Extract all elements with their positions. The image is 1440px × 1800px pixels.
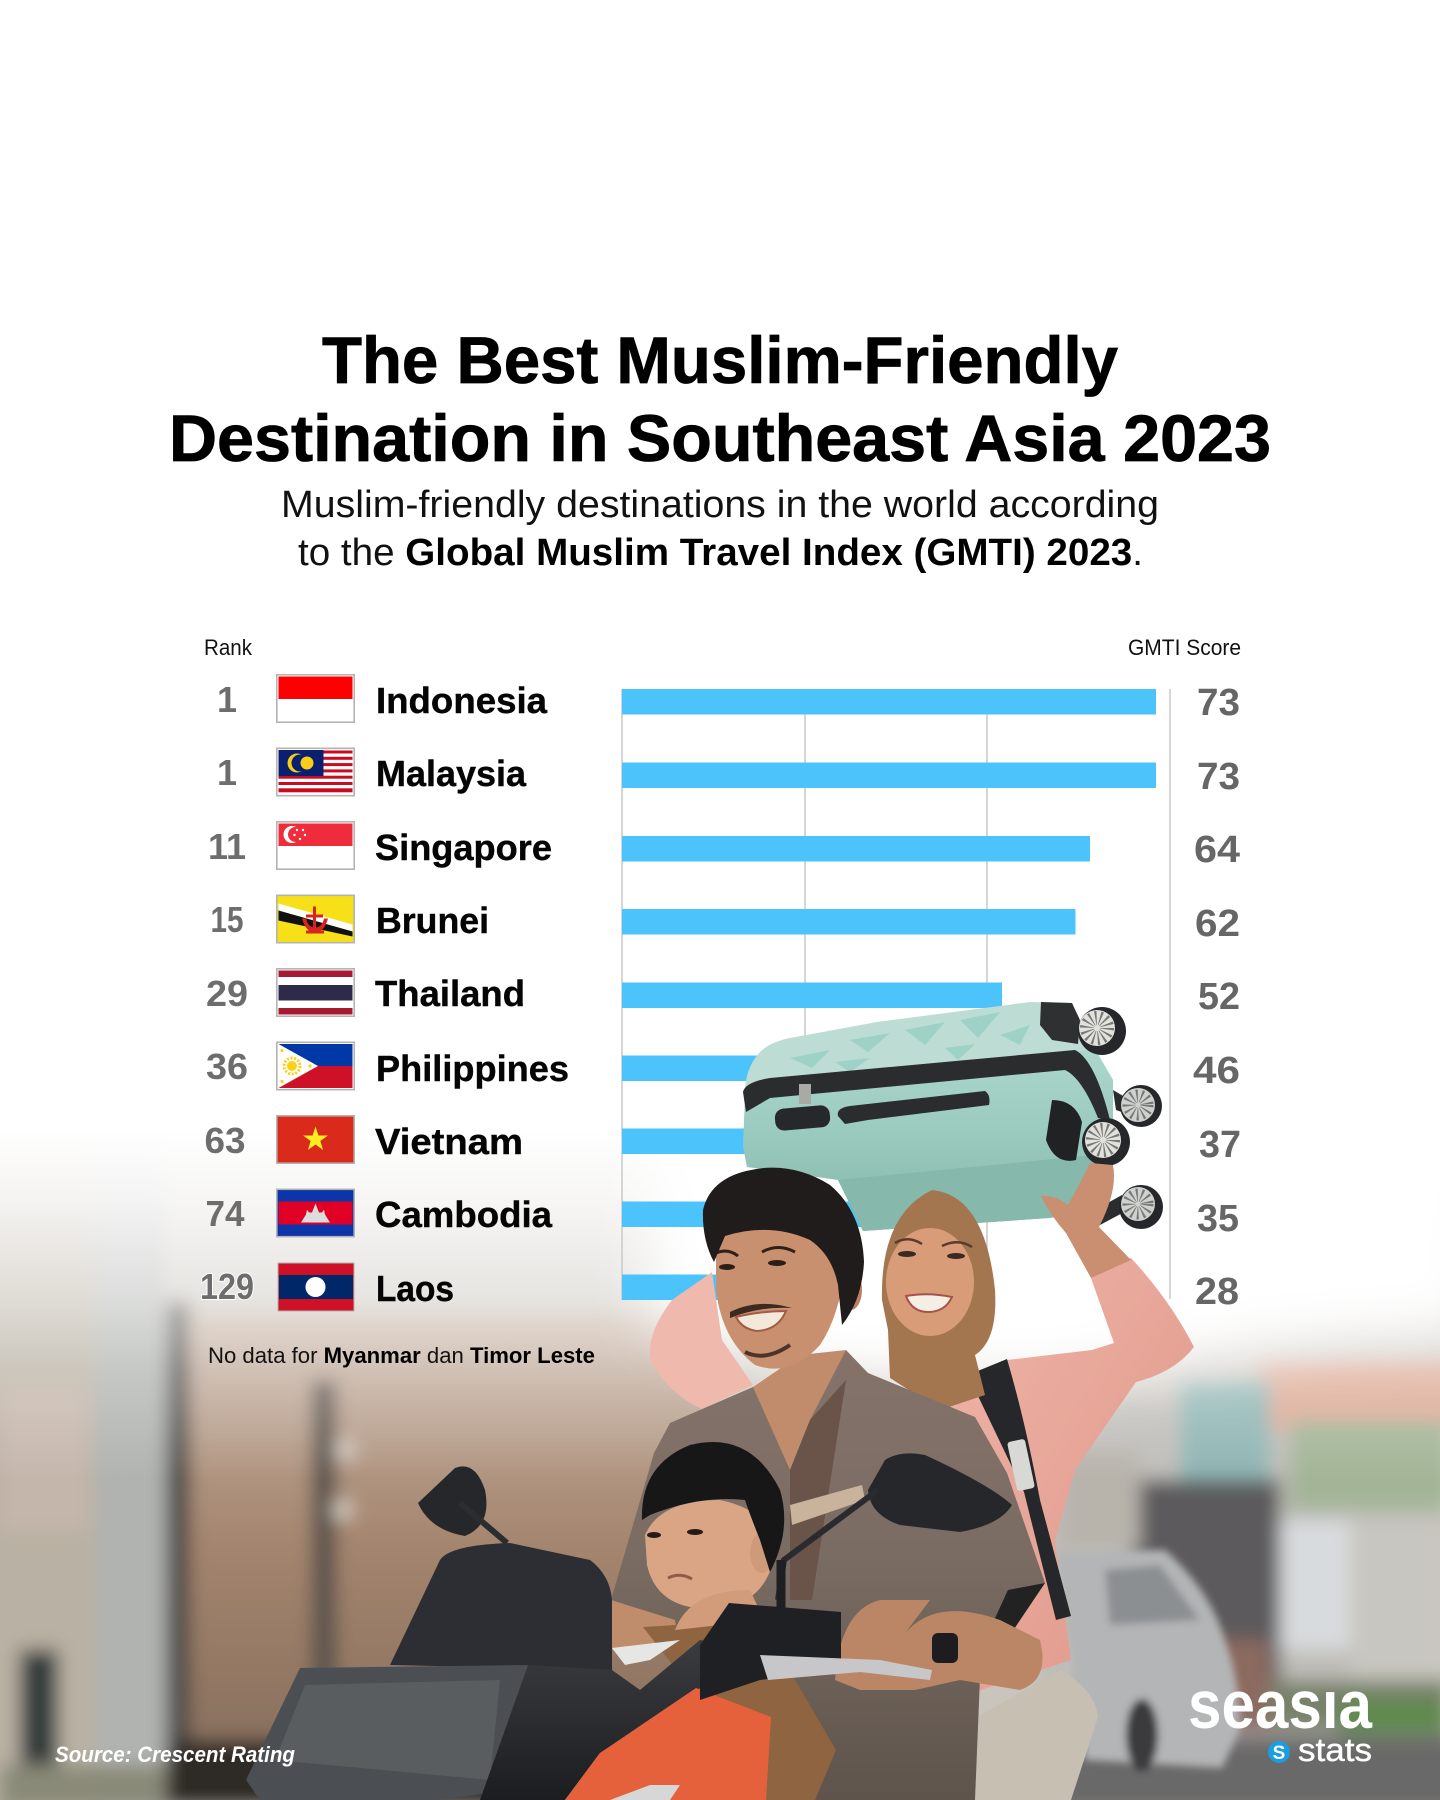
flag: Brunei [277, 895, 354, 943]
photo: woman's hand and forearm [1041, 1163, 1131, 1278]
suitcase wheels [1078, 1007, 1163, 1229]
GMTI score values [1193, 682, 1241, 1313]
column label: GMTI score: GMTI Score [1128, 635, 1241, 660]
windscreen [390, 1543, 612, 1670]
country names: Brunei [376, 900, 489, 941]
orange fender [565, 1688, 771, 1800]
logo: seasia stats [1190, 1691, 1372, 1763]
handlebar and lever [700, 1603, 841, 1700]
flag: Malaysia [277, 748, 354, 796]
suitcase handle [838, 1091, 990, 1124]
title: Destination in Southeast Asia 2023 [169, 401, 1271, 475]
logo: seasia stats: seasia [1188, 1667, 1373, 1743]
GMTI score values: 35 [1197, 1198, 1239, 1240]
GMTI score values: 37 [1199, 1124, 1241, 1166]
photo: suitcase [743, 1002, 1163, 1231]
right mirror [868, 1453, 1012, 1532]
icon: stats badge [1268, 1741, 1290, 1764]
country names: Thailand [375, 973, 525, 1014]
suitcase zipper band [743, 1050, 1110, 1120]
flag: Thailand [277, 969, 354, 1016]
subtitle: to the Global Muslim Travel Index (GMTI) 2023 . [298, 532, 1143, 574]
rank numbers: 63 [204, 1120, 246, 1161]
man's neck and face [716, 1215, 846, 1369]
child's hand [675, 1590, 757, 1630]
logo: seasia stats: stats [1298, 1732, 1372, 1768]
suitcase lower shell [743, 1040, 1113, 1231]
flag: Singapore [277, 822, 354, 869]
photo: man [610, 1168, 1045, 1800]
man's left forearm [610, 1600, 680, 1660]
photo: woman's body and sleeves [650, 1258, 1194, 1692]
column label: rank: Rank [204, 635, 253, 660]
source: Source: Crescent Rating [55, 1742, 296, 1767]
suitcase upper shell [745, 1002, 1090, 1093]
suitcase combination lock [774, 1105, 831, 1131]
man's shirt [611, 1350, 1045, 1800]
man's hair [703, 1168, 864, 1325]
rank numbers: 74 [206, 1193, 244, 1234]
flag: Indonesia [277, 675, 354, 722]
rank numbers: 15 [210, 899, 244, 940]
subtitle [281, 484, 1159, 574]
man's eyes and brows [716, 1248, 795, 1256]
GMTI score values: 52 [1198, 976, 1240, 1018]
chart grid lines [622, 689, 1170, 1300]
man's moustache and smile [730, 1304, 792, 1318]
GMTI score values: 73 [1197, 756, 1240, 798]
dashboard panel [246, 1665, 528, 1800]
flag: Laos [278, 1263, 354, 1311]
child's face [645, 1500, 775, 1607]
photo: woman's trousers [959, 1670, 1098, 1800]
white fade over the photo [0, 1000, 1440, 1480]
country names: Laos [376, 1268, 454, 1309]
country names: Cambodia [375, 1194, 553, 1235]
GMTI score values: 46 [1193, 1050, 1240, 1092]
photo: scooter [246, 1453, 1012, 1800]
country names: Indonesia [376, 680, 548, 721]
title: The Best Muslim-Friendly [322, 323, 1118, 397]
country names [375, 680, 569, 1309]
rank numbers: 129 [200, 1266, 254, 1307]
scooter black body [480, 1640, 760, 1800]
subtitle: Muslim-friendly destinations in the world according [281, 484, 1159, 526]
rank numbers: 1 [217, 752, 237, 793]
photo: child [642, 1442, 836, 1800]
icon: stats badge: S [1273, 1743, 1285, 1764]
flag: Cambodia [277, 1189, 354, 1237]
photo: woman's backpack strap [968, 1359, 1071, 1620]
flag: Vietnam [277, 1116, 354, 1163]
photo: woman's head and hijab [882, 1190, 995, 1410]
woman's face [886, 1228, 974, 1336]
country names: Vietnam [375, 1121, 523, 1162]
child's hair [642, 1442, 784, 1572]
footnote: No data for Myanmar dan Timor Leste [208, 1343, 595, 1368]
country names: Singapore [375, 827, 552, 868]
left mirror [418, 1466, 486, 1536]
man's arm and hand [835, 1600, 1042, 1690]
suitcase quilted pattern [790, 1012, 1030, 1072]
country names: Malaysia [376, 753, 527, 794]
photo background: blurred street scene [0, 1120, 1440, 1800]
GMTI score values: 62 [1195, 903, 1240, 945]
GMTI score values: 64 [1194, 829, 1240, 871]
child's shirt [643, 1620, 836, 1800]
title [169, 323, 1271, 475]
GMTI score values: 28 [1195, 1271, 1239, 1313]
suitcase wheel mounts [1040, 1002, 1080, 1044]
rank numbers: 11 [208, 826, 246, 867]
country names: Philippines [376, 1048, 569, 1089]
rank numbers [200, 679, 254, 1307]
rank numbers: 36 [206, 1046, 248, 1087]
rank numbers: 1 [217, 679, 237, 720]
rank numbers: 29 [206, 973, 248, 1014]
bar chart [622, 689, 1170, 1300]
flag: Philippines [277, 1042, 354, 1090]
score bars [622, 689, 1156, 1300]
GMTI score values: 73 [1197, 682, 1240, 724]
